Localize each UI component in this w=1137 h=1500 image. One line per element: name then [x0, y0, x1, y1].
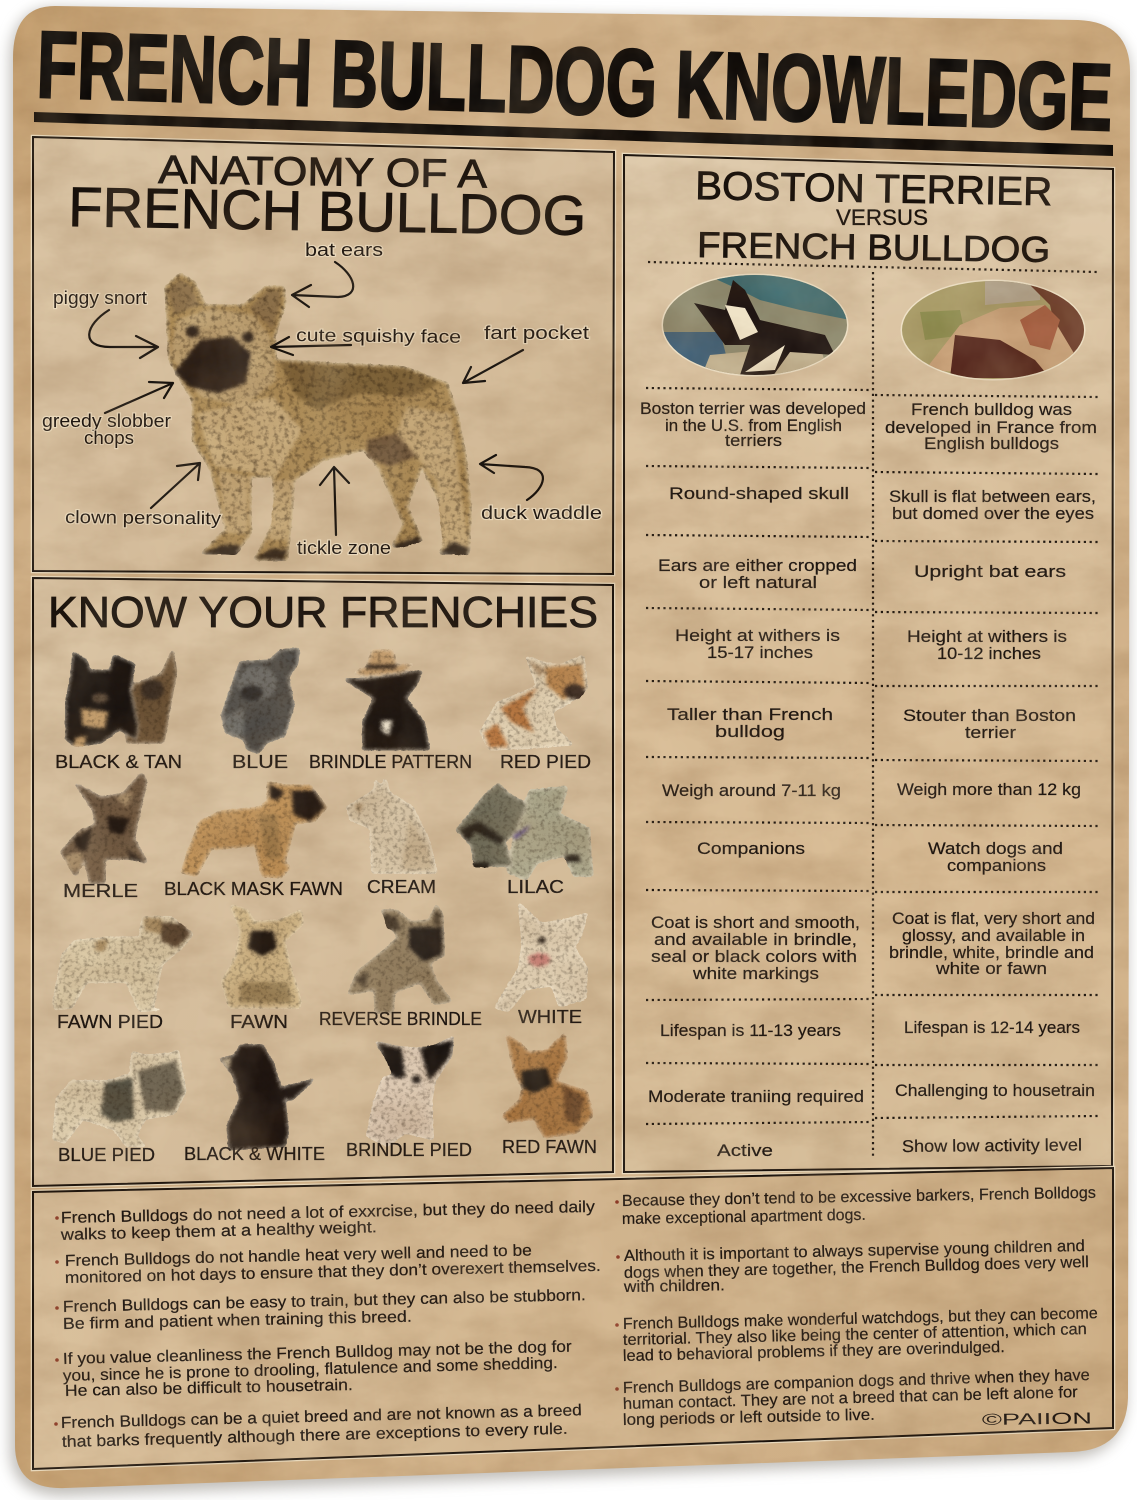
comparison text: French bulldog column: Upright bat ears — [914, 562, 1066, 581]
fact list: left column: If you value cleanliness the French Bulldog may not be the dog for — [63, 1339, 573, 1368]
comparison text: Boston terrier column: Boston terrier was developed — [640, 399, 866, 418]
heading: Boston terrier versus French bulldog: FRENCH BULLDOG — [697, 224, 1050, 270]
anatomy dog illustration — [165, 273, 471, 560]
dog: merle — [61, 773, 147, 883]
fact list: left column: French Bulldogs do not need a lot of exxrcise, but they do need daily — [61, 1199, 595, 1227]
label: bat ears: bat ears — [305, 240, 383, 260]
arrow: tickle zone — [320, 467, 349, 535]
comparison text: Boston terrier column: Taller than French — [667, 705, 833, 724]
fact list: right column: lead to behavioral problems if they are overindulged. — [623, 1339, 1005, 1365]
breed labels: REVERSE BRINDLE — [319, 1009, 482, 1029]
comparison text: French bulldog column: terrier — [965, 723, 1016, 742]
comparison text: Boston terrier column: Companions — [697, 839, 805, 858]
comparison text: Boston terrier column: in the U.S. from English — [665, 416, 842, 435]
breed labels: BRINDLE PATTERN — [309, 752, 472, 772]
fact list: left column: French Bulldogs can be a quiet breed and are not known as a breed — [61, 1402, 582, 1432]
arrow: bat ears — [292, 262, 353, 307]
fact list: right column: Because they don’t tend to be excessive barkers, French Bolldogs — [622, 1185, 1096, 1210]
breed labels: LILAC — [507, 877, 564, 897]
label: clown personality: clown personality — [65, 507, 221, 528]
comparison text: French bulldog column: Coat is flat, very short and — [892, 909, 1095, 928]
comparison text: Boston terrier column: Ears are either cropped — [658, 556, 857, 575]
fact list: right column: with children. — [623, 1277, 725, 1296]
photo: French bulldog — [900, 280, 1090, 380]
fact list: left column: that barks frequently although there are exceptions to every rule. — [62, 1421, 568, 1451]
comparison text: Boston terrier column: Coat is short and smooth, — [651, 913, 860, 932]
breed labels: WHITE — [518, 1007, 582, 1027]
fact list: right column: make exceptional apartment dogs. — [622, 1207, 866, 1228]
comparison text: French bulldog column: Lifespan is 12-14 years — [904, 1018, 1080, 1037]
fact list: left column: monitored on hot days to ensure that they don’t overexert themselves. — [65, 1258, 601, 1287]
comparison text: French bulldog column: Skull is flat between ears, — [889, 487, 1096, 506]
comparison text: French bulldog column — [885, 400, 1097, 1156]
comparison text: Boston terrier column: bulldog — [715, 722, 785, 741]
panel: know your frenchies — [33, 578, 613, 1186]
heading: Boston terrier versus French bulldog: VERSUS — [836, 205, 928, 230]
fact list: right column: Althouth it is important to always supervise young children and — [624, 1238, 1085, 1265]
dog: reverse brindle — [349, 905, 451, 1013]
arrow: duck waddle — [480, 455, 543, 500]
comparison text: Boston terrier column: 15-17 inches — [707, 643, 813, 662]
label: greedy slobber chops: greedy slobber — [42, 411, 171, 431]
breed labels: FAWN — [230, 1012, 288, 1032]
breed labels: BLACK & WHITE — [184, 1144, 325, 1164]
label: greedy slobber chops — [42, 411, 171, 448]
comparison text: French bulldog column: Watch dogs and — [928, 839, 1063, 858]
dog: lilac — [457, 784, 592, 879]
dog: brindle pied — [367, 1037, 453, 1146]
arrow: greedy slobber chops — [105, 382, 173, 413]
dog: black and white — [220, 1045, 314, 1150]
comparison text: French bulldog column: glossy, and available in — [902, 926, 1085, 945]
breed labels: FAWN PIED — [57, 1012, 163, 1032]
fact list: right column: French Bulldogs are companion dogs and thrive when they have — [623, 1367, 1090, 1397]
comparison text: Boston terrier column: or left natural — [699, 573, 817, 592]
comparison text: French bulldog column: companions — [947, 856, 1046, 875]
breed labels: RED PIED — [500, 752, 591, 772]
fact list: right column: human contact. They are not a breed that can be left alone for — [623, 1384, 1079, 1413]
comparison text: French bulldog column: 10-12 inches — [937, 644, 1041, 663]
fact list: left column: you, since he is prone to drooling, flatulence and some shedding. — [63, 1355, 558, 1385]
arrow: clown personality — [151, 463, 200, 508]
dog: fawn — [222, 905, 303, 1008]
comparison text: Boston terrier column: Height at withers is — [675, 626, 840, 645]
comparison text: French bulldog column: Challenging to housetrain — [895, 1081, 1095, 1100]
comparison text: Boston terrier column: Lifespan is 11-13 years — [660, 1021, 841, 1040]
comparison text: Boston terrier column: and available in brindle, — [654, 930, 857, 949]
comparison text: French bulldog column: French bulldog was — [911, 400, 1072, 419]
fact list: right column: French Bulldogs make wonderful watchdogs, but they can become — [623, 1305, 1098, 1333]
dog: black and tan — [66, 650, 176, 746]
heading: Boston terrier versus French bulldog — [695, 164, 1053, 270]
label: fart pocket: fart pocket — [484, 323, 589, 343]
panel: anatomy of a French bulldog — [33, 137, 614, 574]
comparison text: French bulldog column: English bulldogs — [924, 434, 1059, 453]
panel: Boston terrier versus French bulldog — [624, 155, 1113, 1172]
dog illustrations — [53, 649, 592, 1150]
fact list: right column: territorial. They also like being the center of attention, which can — [623, 1321, 1087, 1349]
comparison text: Boston terrier column: seal or black colors with — [651, 947, 857, 966]
breed labels: BLUE PIED — [58, 1145, 155, 1165]
comparison text: Boston terrier column: white markings — [692, 964, 819, 983]
comparison text: French bulldog column: brindle, white, brindle and — [889, 943, 1094, 962]
dog: black mask fawn — [182, 782, 327, 878]
label: greedy slobber chops: chops — [84, 428, 134, 448]
photo: Boston terrier — [660, 270, 850, 380]
breed labels: CREAM — [367, 877, 436, 897]
comparison text: French bulldog column: white or fawn — [935, 959, 1047, 978]
heading: Boston terrier versus French bulldog: BOSTON TERRIER — [695, 164, 1053, 214]
comparison text: Boston terrier column: Moderate traniing required — [648, 1087, 864, 1106]
comparison grid dividers — [646, 262, 1098, 1158]
fact list: left column: French Bulldogs do not handle heat very well and need to be — [65, 1242, 532, 1270]
fact list: right column — [615, 1185, 1098, 1429]
heading: anatomy: ANATOMY OF A — [158, 148, 488, 197]
heading: anatomy: FRENCH BULLDOG — [68, 175, 587, 247]
arrow: cute squishy face — [271, 337, 351, 355]
fact list: left column: walks to keep them at a healthy weight. — [60, 1219, 377, 1244]
fact list: left column: French Bulldogs can be easy to train, but they can also be stubborn. — [63, 1287, 586, 1316]
arrow: piggy snort — [89, 310, 158, 358]
comparison text: French bulldog column: Show low activity level — [902, 1135, 1082, 1156]
comparison text: Boston terrier column — [640, 399, 866, 1160]
heading: know your frenchies: KNOW YOUR FRENCHIES — [48, 588, 598, 637]
copyright mark: ©PAIION — [982, 1410, 1092, 1429]
label: cute squishy face: cute squishy face — [296, 325, 461, 347]
breed labels: RED FAWN — [502, 1137, 597, 1157]
dog: fawn pied — [53, 917, 193, 1011]
comparison text: French bulldog column: Height at withers is — [907, 627, 1067, 646]
dog: red pied — [481, 655, 587, 749]
breed labels — [55, 752, 597, 1165]
fact list: right column: long periods or left outside to live. — [623, 1407, 875, 1429]
comparison text: French bulldog column: developed in France from — [885, 418, 1097, 437]
breed labels: BLACK & TAN — [55, 752, 182, 772]
breed labels: MERLE — [63, 881, 138, 901]
comparison text: Boston terrier column: Round-shaped skull — [669, 484, 849, 503]
label: tickle zone: tickle zone — [297, 538, 391, 558]
comparison text: Boston terrier column: Weigh around 7-11 kg — [662, 781, 841, 800]
comparison text: Boston terrier column: Active — [717, 1141, 773, 1160]
title rule — [34, 112, 1113, 156]
comparison text: French bulldog column: Weigh more than 12 kg — [897, 780, 1081, 799]
label: duck waddle: duck waddle — [481, 503, 602, 523]
dog: brindle with hat — [345, 650, 429, 749]
dog: cream — [347, 779, 437, 873]
fact list: left column — [54, 1199, 601, 1451]
fact list: left column: He can also be difficult to housetrain. — [65, 1377, 353, 1400]
panel: facts — [33, 1168, 1113, 1469]
fact list: left column: Be firm and patient when training this breed. — [63, 1309, 412, 1333]
dog: white — [495, 903, 587, 1011]
dog: blue pied — [53, 1050, 185, 1146]
arrow: fart pocket — [463, 350, 523, 383]
dog: blue — [222, 649, 299, 753]
comparison text: French bulldog column: but domed over the eyes — [892, 504, 1094, 523]
breed labels: BLUE — [232, 752, 288, 772]
comparison text: French bulldog column: Stouter than Boston — [903, 706, 1076, 725]
label: piggy snort: piggy snort — [53, 288, 147, 308]
comparison text: Boston terrier column: terriers — [725, 431, 782, 450]
breed labels: BRINDLE PIED — [346, 1140, 472, 1160]
breed labels: BLACK MASK FAWN — [164, 879, 343, 899]
fact list: right column: dogs when they are together, the French Bulldog does very well — [624, 1254, 1089, 1282]
dog: red fawn — [503, 1033, 592, 1138]
